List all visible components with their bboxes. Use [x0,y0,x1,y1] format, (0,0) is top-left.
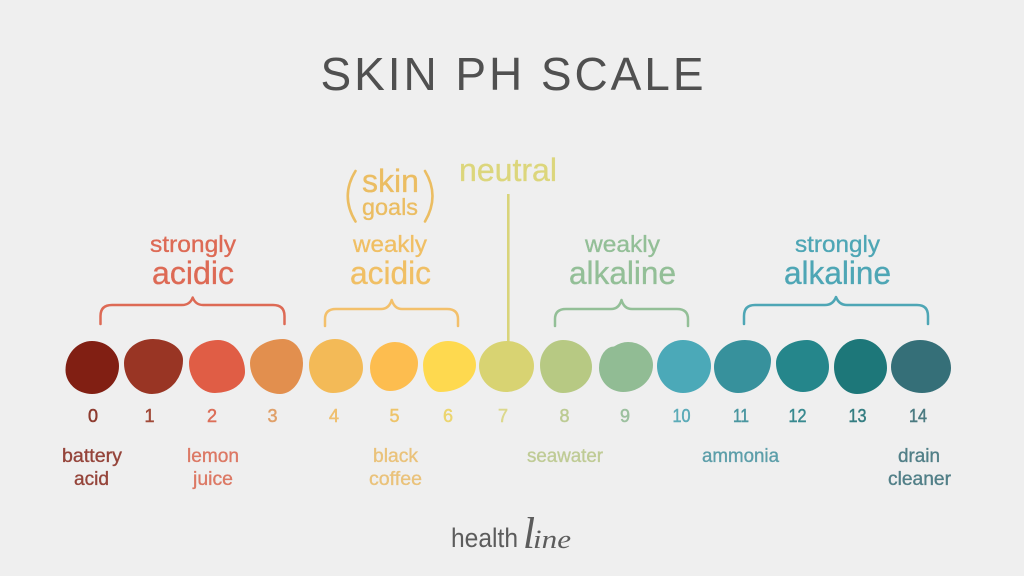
label: neutral: neutral [459,152,557,188]
blob: pH 12 [776,340,829,392]
group: skin goals [348,163,432,222]
example: battery acid: acid [74,468,109,490]
blob: pH 4 [309,339,363,393]
label: strongly alkaline: strongly [795,231,880,257]
number 1: 1 [144,406,155,426]
label: skin goals [362,163,419,220]
label: weakly alkaline: weakly [584,231,660,257]
label: weakly acidic: weakly [352,231,427,257]
blob: pH 10 [657,340,711,393]
label: weakly alkaline: alkaline [569,255,676,291]
parentheses around skin goals [348,171,432,222]
number 11: 11 [733,406,749,426]
pointer line: neutral [507,194,510,344]
number 6: 6 [443,406,453,426]
number 10: 10 [672,406,690,426]
number 13: 13 [848,406,866,426]
pH color blobs [66,339,951,394]
group: strongly acidic [100,231,284,324]
number 3: 3 [267,406,278,426]
label: weakly alkaline [569,231,676,291]
logo: healthline: ine [533,525,571,554]
label: strongly acidic: strongly [150,231,236,257]
number 5: 5 [389,406,400,426]
number 2: 2 [207,406,217,426]
number 9: 9 [620,406,630,426]
number 12: 12 [788,406,806,426]
label: weakly acidic: acidic [350,255,431,291]
number 14: 14 [909,406,927,426]
example: seawater: seawater [527,445,603,467]
bracket: weakly alkaline [555,300,688,326]
bracket: strongly alkaline [744,297,928,324]
group: strongly alkaline [744,231,928,324]
number 7: 7 [498,406,508,426]
label: strongly acidic [150,231,236,291]
example: ammonia: ammonia [702,445,779,467]
example: black coffee [369,445,422,490]
logo: healthline: l [523,509,535,558]
example: lemon juice: juice [192,468,233,490]
blob: pH 2 [189,340,245,393]
example: drain cleaner: cleaner [888,468,951,490]
logo: healthline: health [451,523,518,553]
example substances [62,445,951,490]
label: skin goals: goals [362,194,418,220]
number 0: 0 [88,406,98,426]
blob: pH 7 [479,341,534,392]
bracket: strongly acidic [100,298,284,324]
blob: pH 11 [714,340,771,393]
label: skin goals: skin [362,163,419,199]
example: battery acid: battery [62,445,122,467]
group: weakly acidic [325,231,458,326]
example: battery acid [62,445,122,490]
group: weakly alkaline [555,231,688,326]
number 8: 8 [559,406,570,426]
blob: pH 8 [540,340,592,393]
bracket: weakly acidic [325,300,458,326]
example: lemon juice: lemon [187,445,239,467]
pH numbers [88,406,927,426]
blob: pH 6 [423,341,476,392]
label: weakly acidic [350,231,431,291]
logo: healthline [451,509,571,558]
label: strongly alkaline: alkaline [784,255,891,291]
example: drain cleaner: drain [898,445,940,467]
label: strongly alkaline [784,231,891,291]
example: black coffee: black [373,445,418,467]
blob: pH 9 [599,342,653,392]
number 4: 4 [329,406,339,426]
label: strongly acidic: acidic [152,255,234,291]
blob: pH 1 [124,339,183,394]
blob: pH 13 [834,339,887,394]
blob: pH 5 [370,342,418,391]
example: lemon juice [187,445,239,490]
title: SKIN PH SCALE [320,48,704,100]
blob: pH 3 [250,339,303,394]
blob: pH 14 [891,340,951,393]
blob: pH 0 [66,341,119,394]
example: drain cleaner [888,445,951,490]
example: black coffee: coffee [369,468,422,490]
